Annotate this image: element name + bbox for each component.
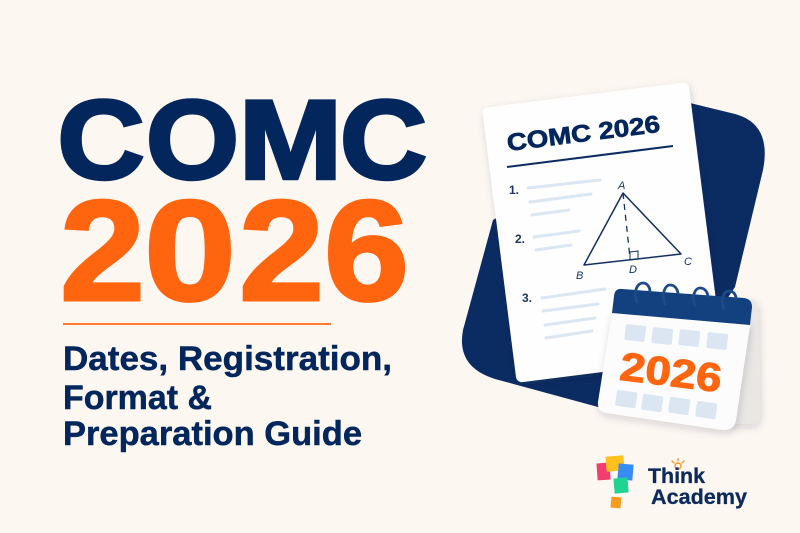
triangle diagram [576, 180, 692, 282]
binder rings [635, 283, 736, 309]
triangle diagram: D [629, 264, 637, 276]
title: 2026: 0 [144, 172, 236, 331]
calendar header [612, 289, 752, 325]
subtitle: Dates, Registration, [63, 340, 392, 378]
title: COMC: O [146, 78, 239, 202]
title: COMC: C [340, 78, 427, 202]
date cells [615, 324, 728, 419]
question numbers: 2. [515, 232, 525, 246]
desk calendar [598, 283, 760, 430]
calendar back page [700, 299, 760, 424]
triangle diagram: B [576, 270, 583, 282]
triangle diagram: C [684, 256, 692, 268]
heading rule [507, 146, 673, 167]
logo bulb [672, 458, 684, 469]
logo wordmark: Academy [651, 486, 747, 509]
question text lines [528, 180, 605, 338]
title: 2026: 6 [324, 172, 409, 331]
logo wordmark [648, 465, 747, 509]
subtitle: Format & [63, 379, 212, 417]
triangle diagram: A [617, 180, 625, 192]
divider rule [63, 323, 331, 325]
navy backdrop shape [462, 103, 765, 407]
logo wordmark: Think [648, 465, 705, 488]
subtitle [63, 340, 392, 453]
calendar year: 2026 [618, 345, 724, 401]
question numbers [509, 183, 532, 305]
title: COMC: M [239, 78, 342, 202]
exam paper [482, 82, 723, 383]
title: 2026 [60, 172, 409, 331]
Think Academy logo [596, 455, 747, 509]
question numbers: 1. [509, 183, 519, 197]
title: COMC [58, 78, 427, 202]
question numbers: 3. [522, 291, 532, 305]
paper heading: COMC 2026 [505, 111, 662, 157]
subtitle: Preparation Guide [63, 415, 362, 453]
calendar body [598, 313, 750, 430]
title: COMC: C [58, 78, 144, 202]
title: 2026: 2 [60, 172, 145, 331]
title: 2026: 2 [239, 172, 324, 331]
logo icon [596, 455, 634, 508]
